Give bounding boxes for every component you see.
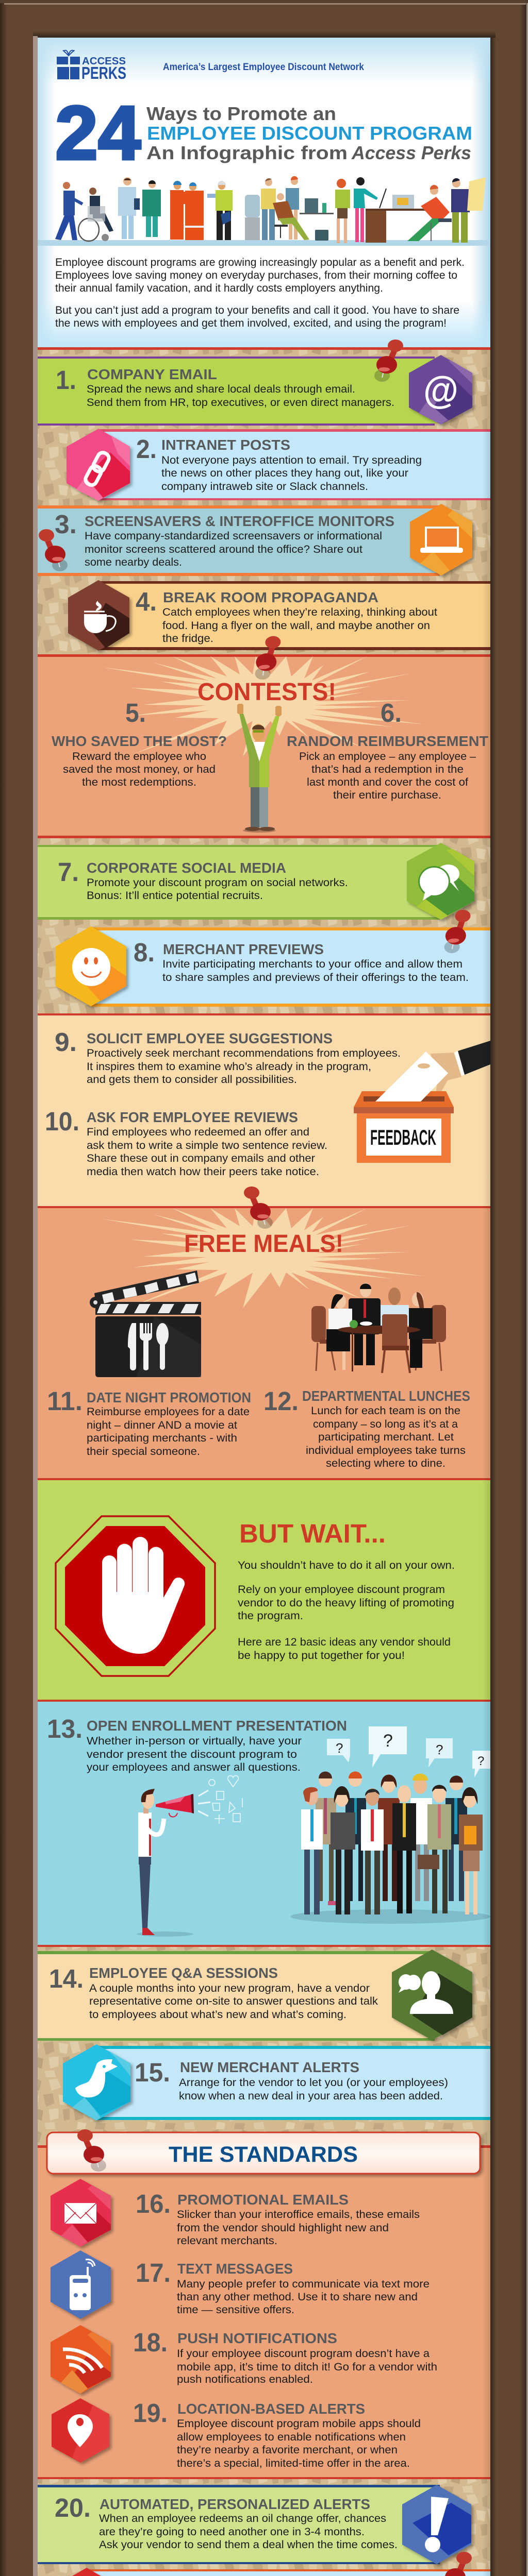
illustration: clapperboard	[90, 1270, 201, 1377]
body text	[85, 530, 382, 568]
title	[55, 91, 472, 176]
body text: Bonus: It’ll entice potential recruits.	[87, 890, 263, 902]
number: 20.	[55, 2493, 91, 2522]
body text: from the vendor should highlight new and	[177, 2222, 389, 2234]
panel: 1 company email	[38, 340, 472, 426]
body text: are they’re going to need another one in 3-4 months.	[99, 2526, 365, 2538]
body text	[99, 2513, 398, 2551]
body text	[177, 2418, 421, 2469]
tagline: America’s Largest Employee Discount Network	[163, 62, 364, 73]
body text: know when a new deal in your area has been added.	[179, 2090, 443, 2102]
body text: the news on other places they hang out, like your	[161, 467, 408, 479]
body text: media then watch how their peers take notice.	[87, 1166, 319, 1178]
body text: food. Hang a flyer on the wall, and maybe another on	[162, 620, 430, 632]
icon: at sign	[409, 355, 472, 425]
heading box: the standards: THE STANDARDS	[169, 2142, 358, 2167]
floor band	[38, 240, 490, 246]
body text: Invite participating merchants to your office and allow them	[162, 958, 463, 970]
body text: When an employee redeems an oil change offer, chances	[99, 2513, 386, 2524]
body text: participating merchant. Let	[318, 1431, 454, 1443]
icon: push pin	[77, 2129, 106, 2172]
panel: header	[38, 38, 490, 350]
body text	[87, 383, 394, 409]
logo: Access Perks: PERKS	[81, 63, 126, 82]
body text: Rely on your employee discount program	[238, 1584, 445, 1596]
intro text: the news with employees and get them involved, excited, and using the program!	[55, 317, 447, 329]
panel: contests	[38, 635, 490, 838]
heading: COMPANY EMAIL	[87, 366, 217, 382]
body text: mobile app, it’s time to ditch it! Go for a vendor with	[177, 2361, 437, 2373]
icon: laptop	[410, 504, 472, 575]
heading: TEXT MESSAGES	[177, 2261, 293, 2277]
body text	[177, 2348, 437, 2385]
panel: 15 new merchant alerts	[63, 2044, 490, 2121]
panel: 7 social media	[38, 843, 474, 920]
number: 6.	[381, 698, 402, 727]
icon: wifi signal	[51, 2325, 111, 2394]
body text: relevant merchants.	[177, 2235, 277, 2247]
logo: Access Perks: ACCESS	[82, 56, 126, 67]
body text: they’re nearby a favorite merchant, or when	[177, 2444, 398, 2456]
panel: 13 open enrollment	[38, 1702, 490, 1947]
body text: there’s a special, limited-time offer in the area.	[177, 2458, 410, 2469]
title: EMPLOYEE DISCOUNT PROGRAM	[147, 123, 472, 144]
number: 19.	[133, 2398, 168, 2428]
body text	[89, 1982, 378, 2021]
icon: envelope	[51, 2179, 111, 2247]
body text: Whether in-person or virtually, have your	[87, 1735, 302, 1747]
heading box: the standards	[47, 2132, 480, 2174]
body text	[179, 2077, 448, 2102]
body text	[299, 751, 476, 801]
heading: EMPLOYEE Q&A SESSIONS	[89, 1965, 278, 1981]
heading: free meals: FREE MEALS!	[184, 1230, 343, 1258]
body text: the most redemptions.	[82, 776, 196, 788]
body text: push notifications enabled.	[177, 2374, 313, 2385]
body text: their special someone.	[87, 1446, 200, 1458]
heading: WHO SAVED THE MOST?	[52, 733, 227, 749]
number: 18.	[133, 2328, 168, 2357]
illustration: workers	[55, 176, 486, 243]
icon: cell phone	[51, 2250, 111, 2319]
icon: coffee cup	[68, 580, 129, 651]
panel: 9 and 10 feedback	[38, 1013, 490, 1208]
icon: person with speech bubbles	[392, 1950, 472, 2040]
body text	[238, 1560, 455, 1662]
icon: map pin	[52, 2398, 109, 2463]
body text	[63, 751, 216, 788]
body text: Ask your vendor to send them a deal when the time comes.	[99, 2539, 398, 2551]
question bubbles: ?	[436, 1742, 443, 1757]
body text: Have company-standardized screensavers or informational	[85, 530, 382, 542]
number: 5.	[125, 698, 146, 727]
icon: stop sign with hand	[56, 1516, 215, 1676]
illustration: man with megaphone	[137, 1789, 194, 1937]
number: 3.	[55, 510, 77, 539]
body text: vendor to do the heavy lifting of promoting	[238, 1597, 454, 1609]
body text: be happy to put together for you!	[238, 1650, 405, 1662]
title: An Infographic from	[146, 142, 348, 163]
body text: Slicker than your interoffice emails, these emails	[177, 2209, 420, 2221]
body text: Here are 12 basic ideas any vendor should	[238, 1636, 451, 1648]
cork board background	[38, 350, 490, 2576]
heading: LOCATION-BASED ALERTS	[177, 2401, 365, 2417]
icon: bird	[63, 2044, 130, 2121]
number: 12.	[263, 1386, 299, 1416]
body text: vendor present the discount program to	[87, 1749, 297, 1760]
illustration: employee crowd	[290, 1771, 490, 1924]
icon: push pin	[251, 635, 285, 681]
title: Access Perks	[351, 142, 471, 163]
question bubbles	[327, 1726, 490, 1777]
question bubbles: ?	[383, 1731, 393, 1751]
logo: Access Perks	[57, 50, 126, 82]
body text	[162, 606, 437, 645]
body text: individual employees take turns	[306, 1445, 466, 1456]
illustration: sound doodles	[198, 1776, 242, 1824]
body text: time — sensitive offers.	[177, 2304, 294, 2316]
heading: contests: CONTESTS!	[197, 679, 336, 706]
body text	[87, 1047, 401, 1086]
body text: Not everyone pays attention to email. Try spreading	[161, 454, 422, 466]
body text: than any other method. Use it to share new and	[177, 2291, 418, 2303]
body text: their entire purchase.	[333, 789, 441, 801]
heading: PROMOTIONAL EMAILS	[177, 2192, 349, 2208]
body text	[177, 2278, 430, 2316]
panel: 4 break room	[68, 580, 490, 651]
icon: speech bubbles	[407, 843, 474, 920]
number: 7.	[58, 857, 79, 887]
body text: your employees and answer all questions.	[87, 1761, 301, 1773]
body text: Arrange for the vendor to let you (or your employees)	[179, 2077, 448, 2089]
body text: representative come on-site to answer questions and talk	[89, 1995, 378, 2007]
illustration: feedback box	[354, 1041, 490, 1163]
heading: MERCHANT PREVIEWS	[163, 941, 324, 957]
number: 11.	[47, 1386, 82, 1416]
body text	[87, 1126, 327, 1178]
body text: the program.	[238, 1610, 303, 1622]
heading: DATE NIGHT PROMOTION	[87, 1389, 251, 1405]
title: 24	[55, 91, 141, 176]
body text	[306, 1405, 466, 1469]
number: 8.	[134, 938, 155, 967]
body text: A couple months into your new program, have a vendor	[89, 1982, 370, 1994]
number: 17.	[136, 2258, 171, 2287]
icon: chain link	[67, 429, 130, 501]
body text: Share these out in company emails and other	[87, 1153, 315, 1164]
body text	[87, 1406, 250, 1458]
body text	[162, 958, 469, 984]
body text: ask them to write a simple two sentence review.	[87, 1140, 327, 1151]
illustration: feedback box: FEEDBACK	[370, 1125, 436, 1149]
number: 2.	[136, 434, 157, 464]
icon: video camera	[48, 2568, 125, 2576]
number: 10.	[45, 1107, 79, 1136]
body text: Employee discount program mobile apps should	[177, 2418, 421, 2430]
body text: Spread the news and share local deals through email.	[87, 383, 355, 395]
intro text: But you can’t just add a program to your benefits and call it good. You have to share	[55, 304, 459, 316]
body text	[87, 1735, 302, 1773]
number: 4.	[136, 587, 157, 616]
body text: Many people prefer to communicate via text more	[177, 2278, 430, 2290]
heading: INTRANET POSTS	[161, 437, 290, 453]
sunburst	[102, 656, 424, 756]
heading: ASK FOR EMPLOYEE REVIEWS	[87, 1109, 298, 1125]
panel: 2 intranet posts	[67, 429, 490, 501]
body text: selecting where to dine.	[326, 1458, 446, 1469]
body text: monitor screens scattered around the office? Share out	[85, 544, 362, 555]
body text	[87, 877, 348, 902]
illustration: diners at table	[311, 1283, 446, 1373]
body text	[177, 2209, 420, 2247]
heading: SOLICIT EMPLOYEE SUGGESTIONS	[87, 1030, 333, 1046]
sunburst	[102, 1208, 424, 1308]
body text: to share samples and previews of their offerings to the team.	[162, 972, 469, 984]
panel: 8 merchant previews	[56, 909, 490, 1007]
icon: exclamation mark	[402, 2485, 471, 2564]
heading: CORPORATE SOCIAL MEDIA	[87, 860, 286, 876]
number: 16.	[136, 2189, 171, 2218]
number: 13.	[47, 1714, 82, 1743]
panel: 21 demo videos	[48, 2552, 490, 2576]
body text: company – so long as it’s at a	[313, 1418, 458, 1430]
icon: at sign: @	[423, 368, 458, 411]
heading: NEW MERCHANT ALERTS	[180, 2059, 359, 2075]
body text: company intraweb site or Slack channels.	[161, 481, 368, 493]
heading: but wait: BUT WAIT...	[239, 1519, 386, 1548]
body text: allow employees to enable notifications when	[177, 2431, 406, 2443]
question bubbles: ?	[477, 1754, 484, 1768]
question bubbles: ?	[336, 1740, 343, 1756]
body text: Proactively seek merchant recommendations from employees.	[87, 1047, 401, 1059]
body text: Lunch for each team is on the	[311, 1405, 460, 1417]
number: 9.	[55, 1027, 77, 1057]
illustration: man with raised arms	[237, 704, 282, 833]
body text: some nearby deals.	[85, 556, 182, 568]
panel: 20 automated alerts	[38, 2485, 471, 2564]
body text: saved the most money, or had	[63, 764, 216, 775]
icon: push pin	[39, 529, 68, 571]
icon: smiley	[56, 926, 126, 1006]
icon: push pin	[443, 2552, 472, 2576]
panel: but wait	[38, 1480, 490, 1702]
body text: night – dinner AND a movie at	[87, 1419, 237, 1431]
number: 15.	[135, 2058, 170, 2087]
heading: OPEN ENROLLMENT PRESENTATION	[87, 1718, 347, 1734]
body text: the fridge.	[162, 633, 213, 645]
body text: Send them from HR, top executives, or even direct managers.	[87, 397, 394, 409]
body text: You shouldn’t have to do it all on your own.	[238, 1560, 455, 1571]
body text: Reimburse employees for a date	[87, 1406, 250, 1418]
icon: push pin	[441, 909, 474, 954]
heading: PUSH NOTIFICATIONS	[177, 2330, 337, 2346]
body text: It inspires them to examine who’s already in the program,	[87, 1061, 371, 1073]
panel: the standards	[38, 2129, 490, 2479]
heading: SCREENSAVERS & INTEROFFICE MONITORS	[85, 513, 394, 529]
body text: participating merchants - with	[87, 1432, 237, 1444]
panel: 3 screensavers	[38, 504, 472, 576]
body text: last month and cover the cost of	[307, 776, 468, 788]
icon: push pin	[244, 1187, 273, 1229]
body text: to employees about what’s new and what’s coming.	[89, 2009, 346, 2021]
body text: Reward the employee who	[72, 751, 206, 762]
icon: push pin	[374, 340, 403, 382]
intro text: Employee discount programs are growing increasingly popular as a benefit and perk.	[55, 257, 465, 268]
body text	[161, 454, 422, 493]
body text: Pick an employee – any employee –	[299, 751, 476, 762]
intro text: their annual family vacation, and it hardly costs employers anything.	[55, 282, 383, 294]
heading: DEPARTMENTAL LUNCHES	[302, 1388, 470, 1404]
heading: RANDOM REIMBURSEMENT	[287, 733, 488, 749]
intro text	[55, 257, 465, 329]
body text: Catch employees when they’re relaxing, thinking about	[162, 606, 437, 618]
panel: free meals	[38, 1187, 490, 1480]
panel right-edge shading	[482, 350, 490, 2576]
number: 14.	[49, 1964, 84, 1993]
heading: AUTOMATED, PERSONALIZED ALERTS	[100, 2496, 370, 2512]
panel: 14 employee Q&A	[38, 1950, 472, 2041]
number: 1.	[56, 365, 76, 395]
intro text: Employees love saving money on everyday purchases, from their morning coffee to	[55, 269, 457, 281]
body text: that’s had a redemption in the	[311, 764, 464, 775]
title: Ways to Promote an	[146, 103, 336, 124]
body text: and gets them to consider all possibilities.	[87, 1074, 297, 1086]
heading: BREAK ROOM PROPAGANDA	[163, 589, 378, 605]
body text: If your employee discount program doesn’t have a	[177, 2348, 430, 2360]
body text: Find employees who redeemed an offer and	[87, 1126, 309, 1138]
body text: Promote your discount program on social networks.	[87, 877, 348, 889]
